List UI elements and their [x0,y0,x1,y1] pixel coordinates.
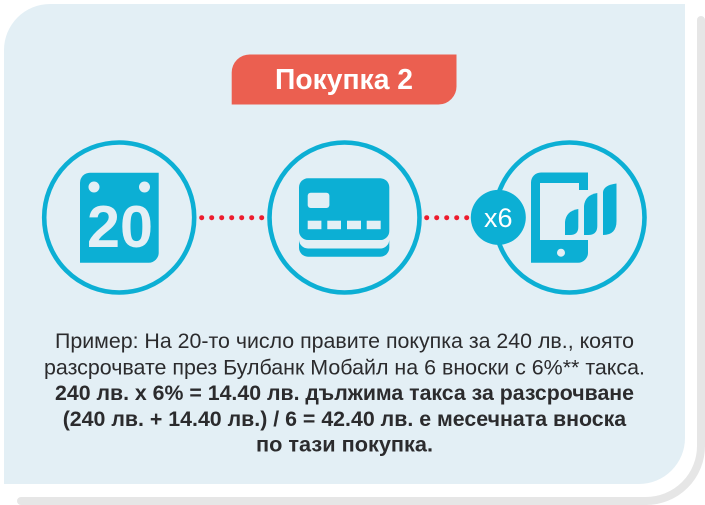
step 1: calendar icon in circle: 20 [87,194,153,260]
step 1: calendar icon in circle [44,142,194,292]
step 2: credit card icon in circle [270,142,420,292]
example text: Пример: На 20-то число правите покупка за 240 лв., която [55,329,634,353]
example text: 240 лв. х 6% = 14.40 лв. дължима такса за разсрочване [55,381,634,405]
badge: x6: x6 [484,203,512,233]
dotted connector 2 [424,215,469,220]
example text: разсрочвате през Булбанк Мобайл на 6 вноски с 6%** такса. [44,356,645,380]
example text [44,329,645,456]
example text: (240 лв. + 14.40 лв.) / 6 = 42.40 лв. е месечната вноска [63,407,627,431]
badge: Покупка 2 [232,54,457,104]
badge: x6 [471,190,526,245]
step 3: mobile phone icon in circle [494,142,644,292]
badge: Покупка 2: Покупка 2 [275,64,413,96]
dotted connector 1 [199,215,264,220]
example text: по тази покупка. [256,432,433,456]
